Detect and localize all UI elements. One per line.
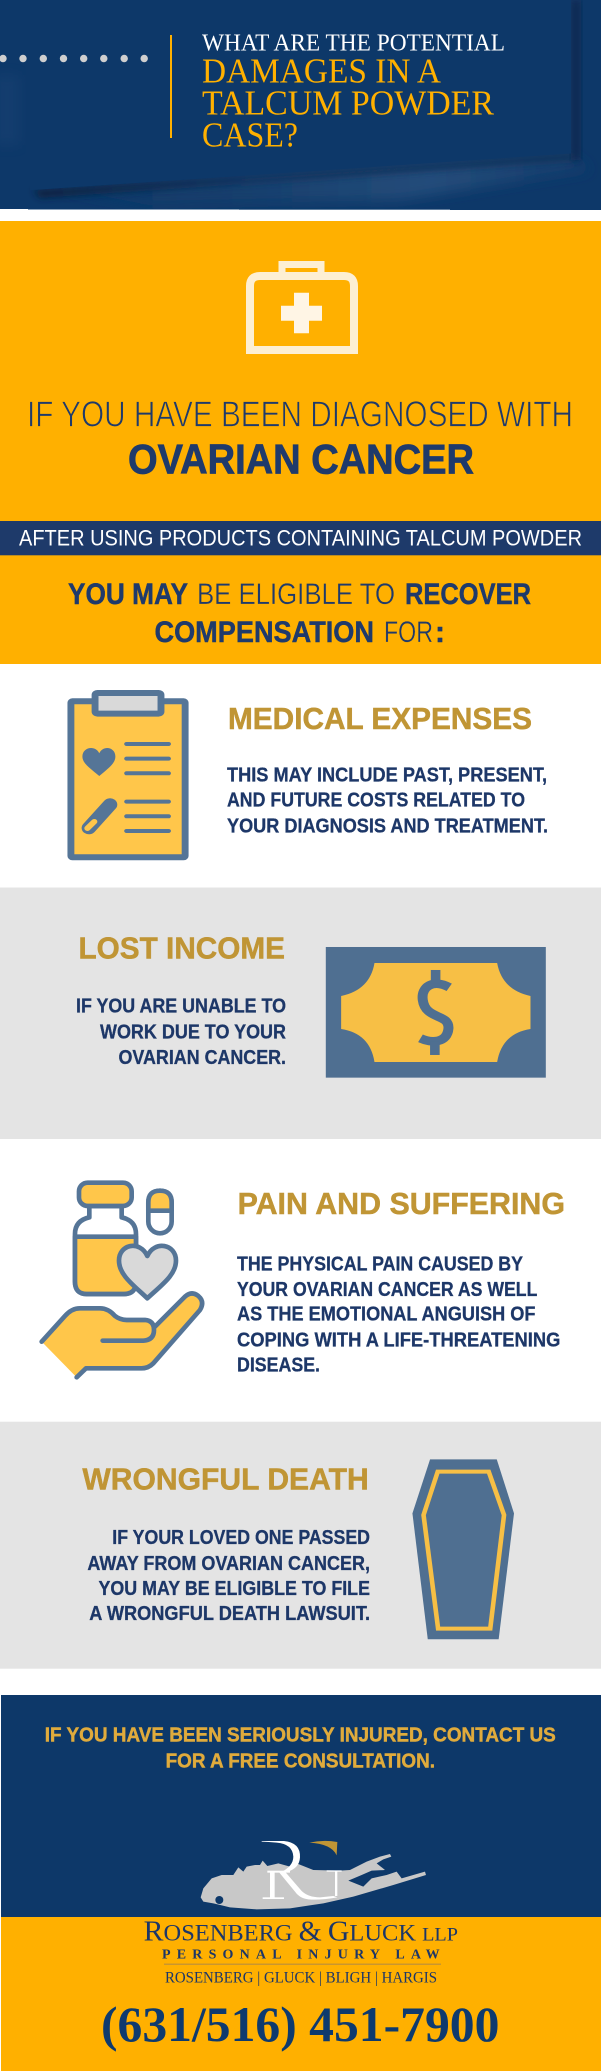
- panel: header banner: [0, 0, 601, 210]
- icon: coffin: [412, 1459, 514, 1639]
- title: TALCUM POWDER: [202, 84, 495, 123]
- text: eligible to recover compensation: FOR: [384, 616, 433, 649]
- text: wrongful death description: IF YOUR LOVED ONE PASSED: [112, 1527, 370, 1549]
- text: eligible to recover compensation: RECOVER: [405, 578, 531, 611]
- panel: medical expenses: [0, 664, 601, 887]
- panel: wrongful death: [0, 1422, 601, 1669]
- text: pain and suffering description: THE PHYSICAL PAIN CAUSED BY: [237, 1254, 524, 1276]
- text: eligible to recover compensation: [68, 578, 531, 649]
- icon: first aid kit: [250, 264, 354, 350]
- heading: lost income: LOST INCOME: [78, 930, 285, 965]
- text: wrongful death description: AWAY FROM OVARIAN CANCER,: [87, 1553, 370, 1575]
- text: partner names: ROSENBERG | GLUCK | BLIGH | HARGIS: [165, 1970, 437, 1987]
- panel: ovarian cancer intro: [0, 221, 601, 664]
- icon: clipboard: [71, 693, 185, 857]
- text: lost income description: IF YOU ARE UNABLE TO: [76, 996, 286, 1018]
- decorative dotted line: [0, 55, 148, 62]
- text: medical expenses description: AND FUTURE COSTS RELATED TO: [227, 790, 525, 812]
- text: eligible to recover compensation: BE ELIGIBLE TO: [197, 578, 395, 611]
- text: wrongful death description: [87, 1527, 370, 1625]
- text: lost income description: WORK DUE TO YOUR: [100, 1022, 286, 1044]
- text: free consultation: IF YOU HAVE BEEN SERIOUSLY INJURED, CONTACT US: [45, 1725, 556, 1747]
- text: lost income description: OVARIAN CANCER.: [118, 1047, 286, 1069]
- text: pain and suffering description: YOUR OVARIAN CANCER AS WELL: [237, 1279, 537, 1301]
- text: medical expenses description: [227, 765, 548, 837]
- text: eligible to recover compensation: :: [435, 616, 445, 649]
- text: phone number: (631/516) 451-7900: [101, 1996, 499, 2052]
- text: wrongful death description: YOU MAY BE ELIGIBLE TO FILE: [98, 1578, 370, 1600]
- panel: lost income: [0, 888, 601, 1139]
- heading: pain and suffering: PAIN AND SUFFERING: [238, 1186, 565, 1221]
- title: DAMAGES IN A: [202, 52, 442, 91]
- panel: firm contact: [1, 1917, 601, 2071]
- text: eligible to recover compensation: COMPENSATION: [154, 616, 374, 649]
- heading: wrongful death: WRONGFUL DEATH: [82, 1461, 369, 1496]
- icon: medicine bottle, heart and hand: [42, 1183, 202, 1377]
- text: pain and suffering description: [237, 1254, 560, 1377]
- title: WHAT ARE THE POTENTIAL: [202, 31, 505, 57]
- text: medical expenses description: THIS MAY INCLUDE PAST, PRESENT,: [227, 765, 547, 787]
- text: wrongful death description: A WRONGFUL DEATH LAWSUIT.: [89, 1603, 370, 1625]
- heading: medical expenses: MEDICAL EXPENSES: [228, 701, 532, 736]
- title: CASE?: [202, 116, 298, 155]
- text: pain and suffering description: AS THE EMOTIONAL ANGUISH OF: [237, 1304, 536, 1326]
- text: pain and suffering description: DISEASE.: [237, 1355, 320, 1377]
- panel: pain and suffering: [0, 1139, 601, 1422]
- text: eligible to recover compensation: YOU MAY: [68, 578, 188, 611]
- text: free consultation: FOR A FREE CONSULTATION.: [166, 1751, 435, 1773]
- text: lost income description: [76, 996, 286, 1069]
- text: pain and suffering description: COPING WITH A LIFE-THREATENING: [237, 1330, 560, 1352]
- text: medical expenses description: YOUR DIAGNOSIS AND TREATMENT.: [227, 815, 548, 837]
- text: personal injury law: PERSONAL INJURY LAW: [162, 1948, 440, 1963]
- title: [202, 31, 505, 155]
- heading: ovarian cancer: OVARIAN CANCER: [128, 435, 474, 482]
- panel: contact call to action: [1, 1695, 601, 1917]
- text: firm name: ROSENBERG & GLUCK LLP: [144, 1917, 458, 1948]
- logo: Long Island map with monogram: [201, 1841, 426, 1909]
- text: free consultation: [45, 1725, 556, 1773]
- icon: dollar bill: [326, 947, 546, 1078]
